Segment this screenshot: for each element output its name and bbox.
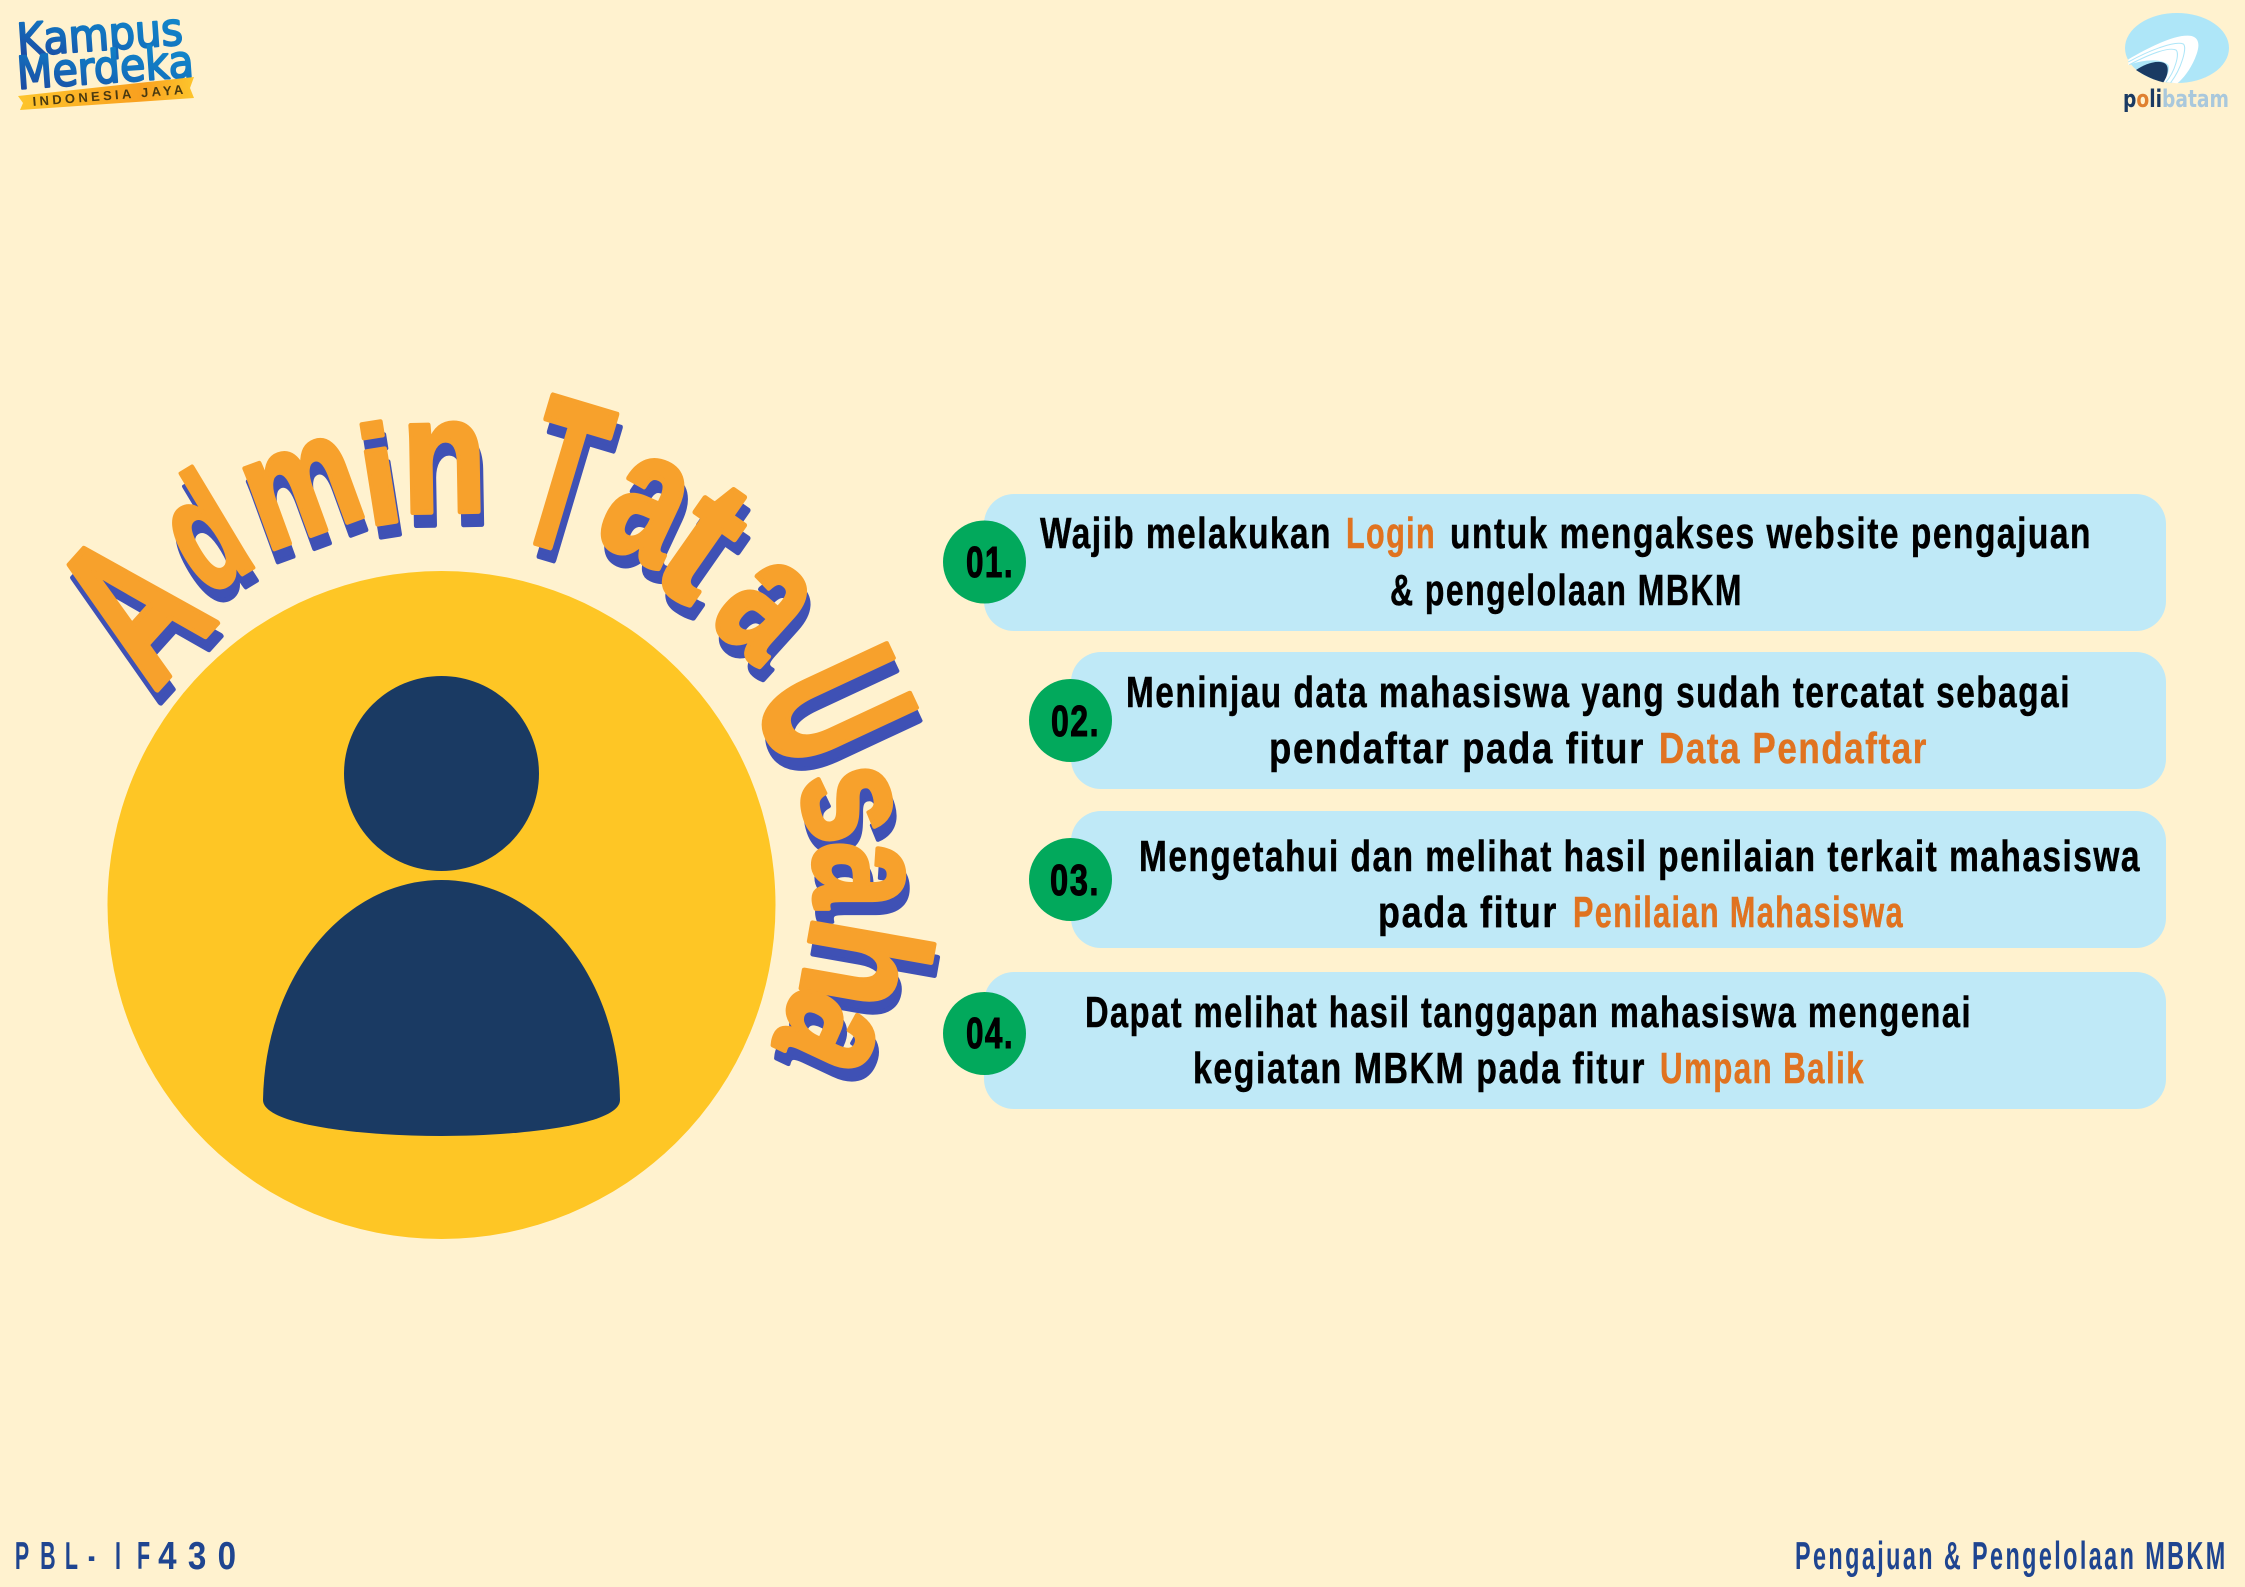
panel: step 01: Wajib melakukan (1040, 509, 1332, 558)
title: Admin Tata Usaha curved: n (404, 376, 491, 562)
logo: Kampus Merdeka: Kampus (15, 3, 184, 67)
logo: polibatam: polibatam (2123, 85, 2229, 113)
panel: step 03: Penilaian Mahasiswa (1573, 888, 1904, 937)
footer: project code (15, 1533, 236, 1578)
title: Admin Tata Usaha curved: s (764, 743, 955, 859)
title: Admin Tata Usaha curved: a (576, 387, 729, 605)
panel: step 02 (1029, 652, 2166, 789)
panel: step 01 (943, 494, 2166, 631)
title: Admin Tata Usaha curved: m (219, 389, 386, 598)
title: Admin Tata Usaha curved: n (400, 363, 488, 549)
panel: step 03 (1029, 811, 2166, 948)
panel: step 03: 03. (1050, 856, 1100, 905)
title: Admin Tata Usaha curved: d (129, 437, 277, 626)
title: Admin Tata Usaha curved: U (714, 631, 963, 808)
logo: Kampus Merdeka (15, 3, 195, 110)
title: Admin Tata Usaha curved: T (496, 352, 632, 599)
panel: step 02: pendaftar pada fitur (1269, 724, 1645, 773)
title: Admin Tata Usaha curved: h (764, 907, 966, 1024)
title: Admin Tata Usaha curved: a (742, 979, 945, 1123)
title: Admin Tata Usaha curved: U (711, 618, 960, 795)
panel: step 04: Umpan Balik (1660, 1044, 1865, 1093)
title: Admin Tata Usaha curved: t (624, 439, 787, 640)
footer: project code: PBL-IF (15, 1534, 150, 1578)
title: Admin Tata Usaha curved: a (780, 842, 965, 910)
title: Admin Tata Usaha curved: i (348, 395, 411, 556)
panel: step 03: pada fitur (1378, 888, 1558, 937)
logo: polibatam (2123, 13, 2229, 113)
title: Admin Tata Usaha curved: A (10, 490, 254, 724)
title: Admin Tata Usaha curved: s (767, 756, 959, 872)
panel: step 02: 02. (1051, 697, 1100, 746)
title: Admin Tata Usaha curved: a (579, 400, 733, 618)
footer: project title: Pengajuan & Pengelolaan MBKM (1795, 1534, 2225, 1577)
title: Admin Tata Usaha curved: A (14, 503, 258, 737)
title: Admin Tata Usaha curved: a (685, 517, 869, 709)
panel: step 04 (943, 972, 2166, 1109)
title: Admin Tata Usaha curved: T (499, 365, 635, 612)
title: Admin Tata Usaha curved: m (216, 376, 382, 585)
logo: Kampus Merdeka: Merdeka (15, 35, 195, 100)
panel: step 01: 01. (966, 538, 1014, 587)
panel: step 02: Data Pendaftar (1659, 724, 1928, 773)
panel: step 01: & pengelolaan MBKM (1390, 566, 1743, 615)
panel: step 01: Login (1346, 509, 1436, 558)
illustration: person in yellow circle (108, 571, 776, 1239)
title: Admin Tata Usaha curved: a (682, 504, 865, 696)
logo: Kampus Merdeka: INDONESIA JAYA (32, 82, 184, 109)
panel: step 04: kegiatan MBKM pada fitur (1193, 1044, 1646, 1093)
title: Admin Tata Usaha curved: t (628, 452, 791, 653)
footer: project code: 430 (158, 1533, 236, 1578)
title: Admin Tata Usaha curved: d (132, 450, 281, 639)
title: Admin Tata Usaha curved (10, 352, 970, 1123)
title: Admin Tata Usaha curved: a (739, 966, 941, 1110)
title: Admin Tata Usaha curved: h (768, 920, 970, 1037)
title: Admin Tata Usaha curved: i (351, 408, 414, 569)
panel: step 04: 04. (966, 1009, 1014, 1058)
title: Admin Tata Usaha curved: a (783, 855, 968, 923)
